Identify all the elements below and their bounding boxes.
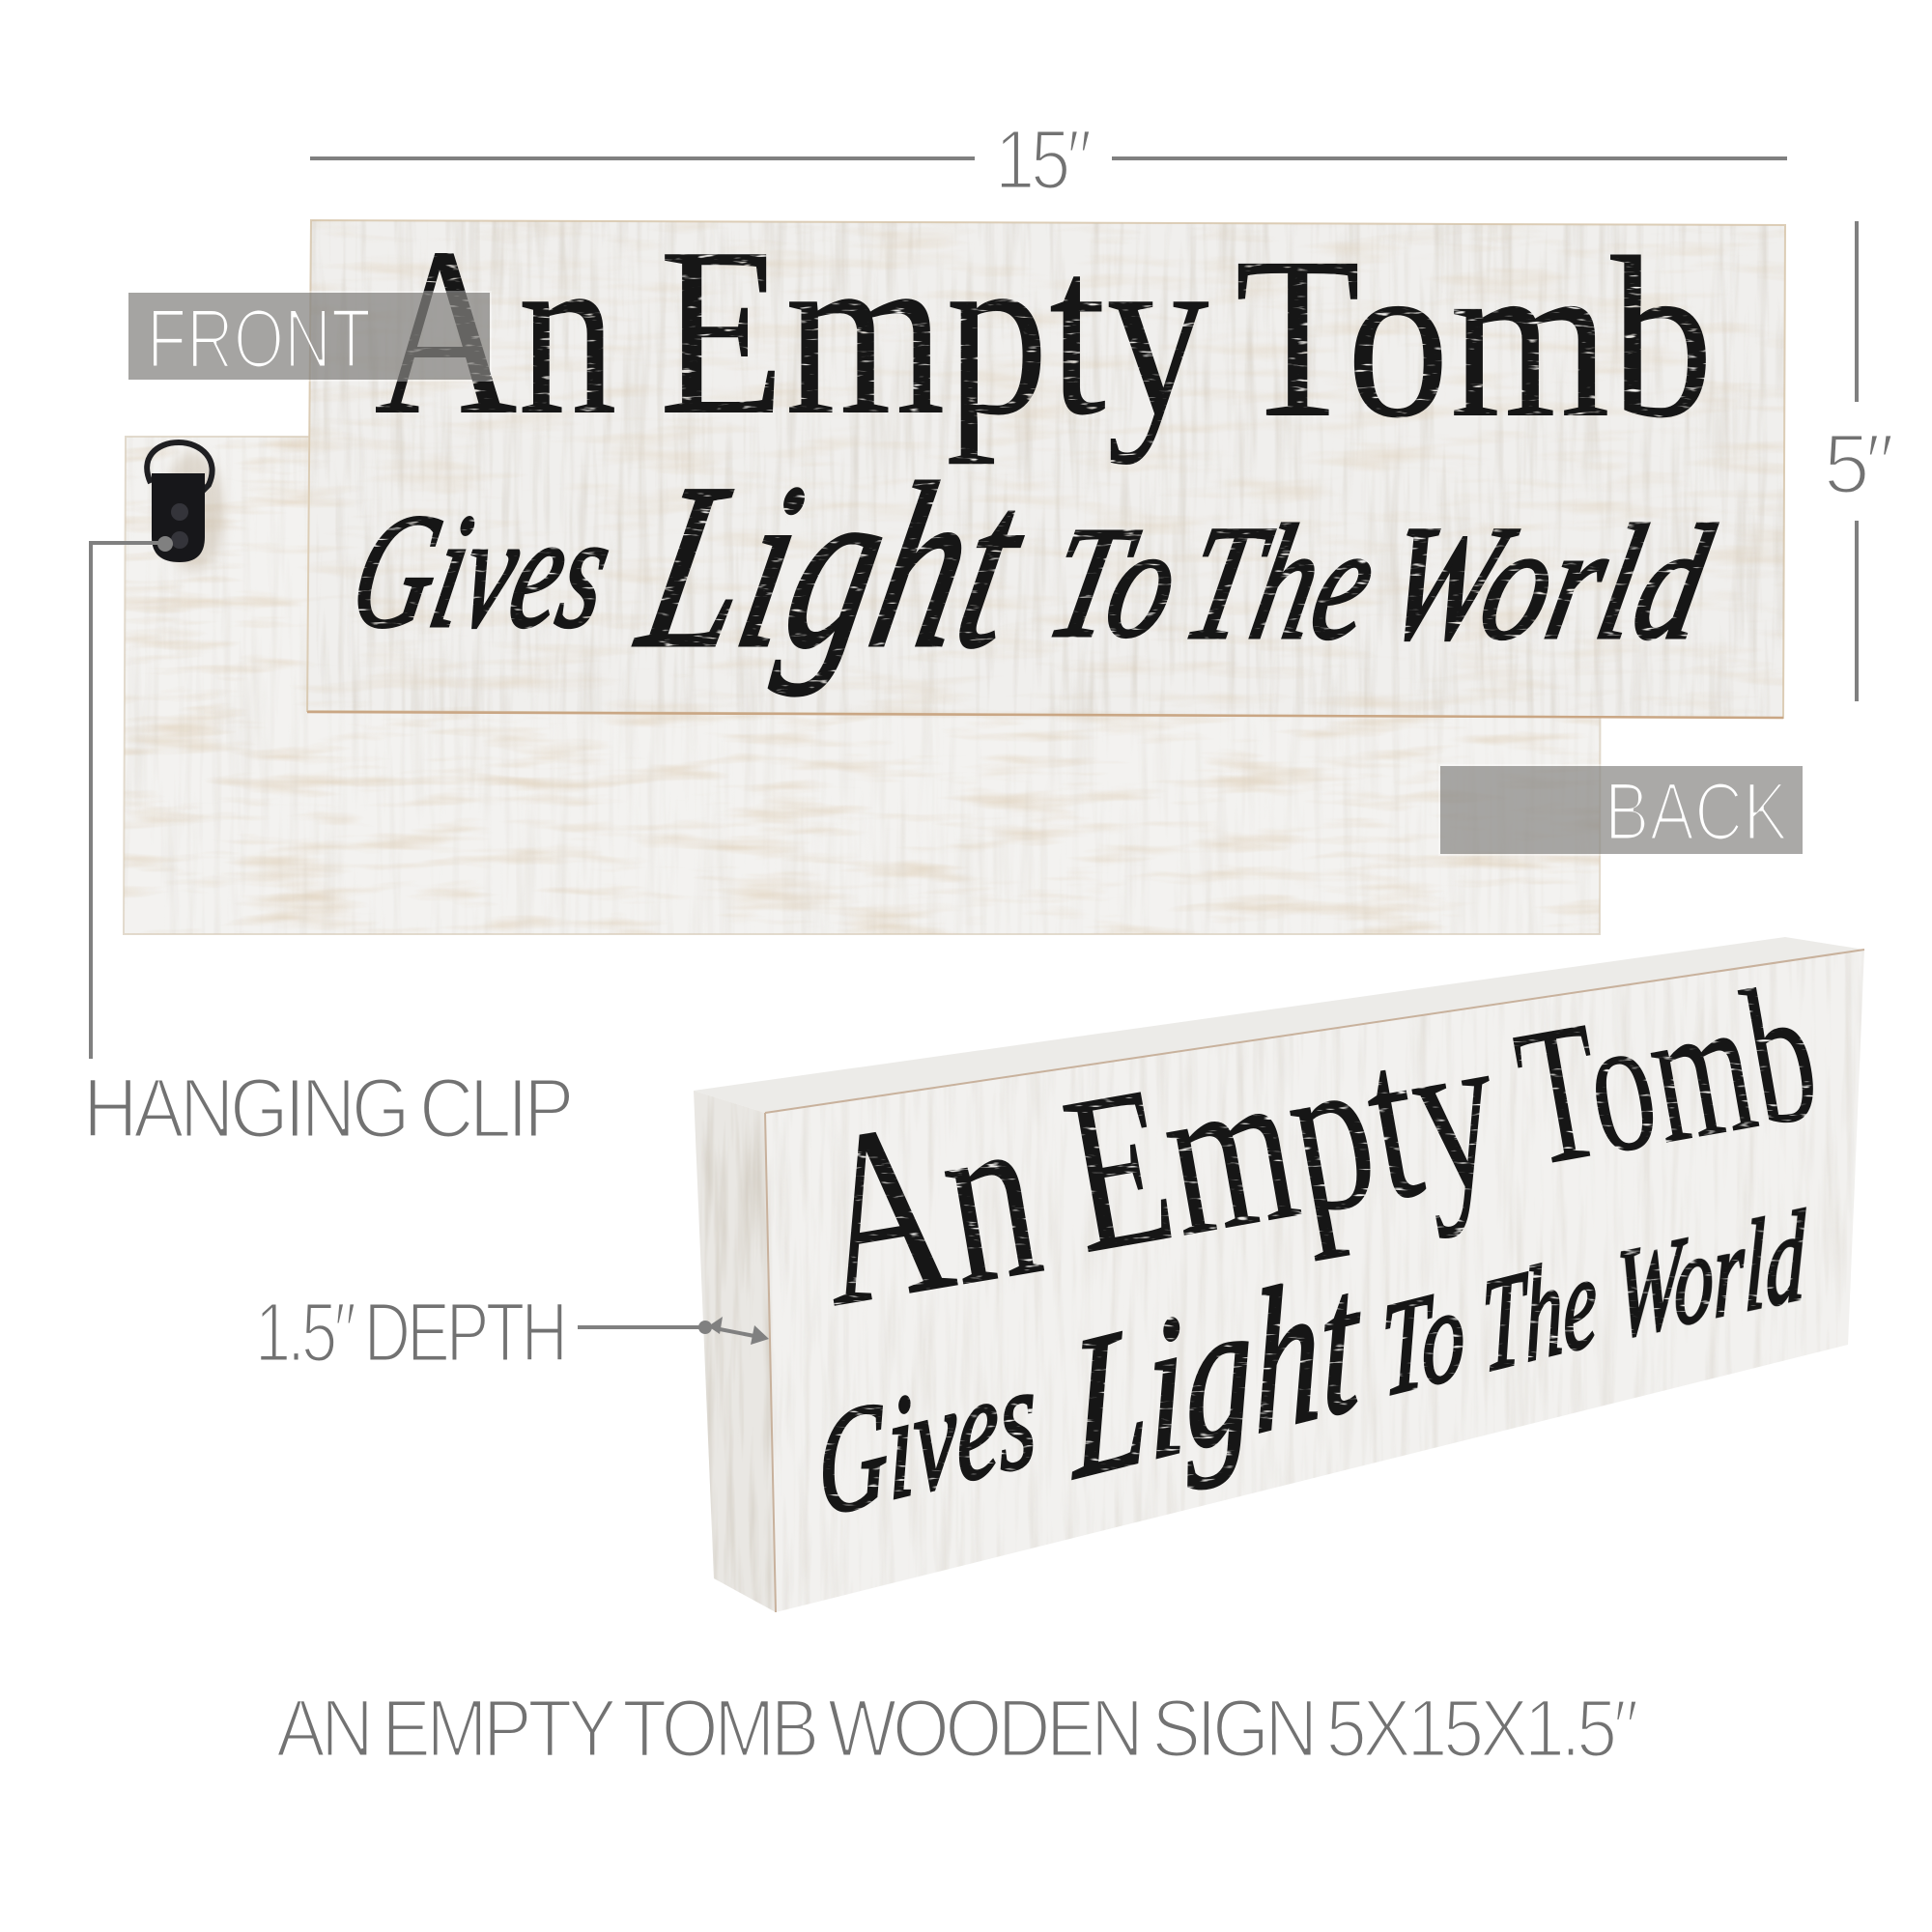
dimension: 5 inch height — [1824, 221, 1893, 701]
label: BACK — [1438, 764, 1804, 857]
dimension: 15 inch width: 15″ — [995, 113, 1092, 207]
front board — [307, 198, 1787, 719]
angled sign lettering: Gives — [815, 1330, 1038, 1548]
callout: depth leader and arrow — [578, 1317, 769, 1345]
label: BACK: BACK — [1605, 766, 1788, 857]
top face of angled sign — [694, 937, 1864, 1113]
front board lettering: Gives Light To The World: Light — [621, 434, 1045, 696]
angled sign lettering: Empty — [1049, 980, 1516, 1301]
label: HANGING CLIP: HANGING CLIP — [83, 1062, 571, 1155]
angled sign lettering: World — [1616, 1184, 1805, 1366]
angled sign lettering: An — [796, 1051, 1056, 1359]
back board — [124, 437, 1602, 935]
front board lettering: Gives Light To The World: World — [1370, 493, 1725, 674]
dimension: 15 inch width — [310, 113, 1787, 207]
front board lettering: Gives Light To The World: The — [1171, 493, 1390, 674]
front board lettering: Gives Light To The World: Gives — [338, 481, 626, 663]
front board lettering: Gives Light To The World: To — [1035, 495, 1193, 671]
label: FRONT: FRONT — [147, 293, 371, 385]
front face of angled sign — [763, 947, 1866, 1615]
angled sign lettering: The — [1480, 1224, 1599, 1401]
angled sign lettering — [796, 942, 1832, 1548]
label: 1.5 inch depth: 1.5″ DEPTH — [255, 1286, 564, 1379]
angled sign lettering: To — [1379, 1256, 1466, 1425]
angled sign lettering: Light — [1065, 1226, 1365, 1522]
angled sign — [692, 937, 1866, 1615]
front board lettering: Gives Light To The World — [338, 434, 1725, 696]
side face of angled sign — [692, 1090, 779, 1613]
callout: hanging clip leader — [91, 536, 173, 1059]
front board lettering: An Empty Tomb: An — [374, 198, 617, 466]
front board lettering: An Empty Tomb: Tomb — [1235, 209, 1714, 466]
dimension: 5 inch height: 5″ — [1824, 417, 1893, 511]
icon: hanging clip — [147, 442, 224, 572]
front board lettering: An Empty Tomb — [374, 198, 1714, 466]
front board lettering: An Empty Tomb: Empty — [659, 198, 1209, 466]
title: AN EMPTY TOMB WOODEN SIGN 5X15X1.5″ — [276, 1683, 1638, 1774]
